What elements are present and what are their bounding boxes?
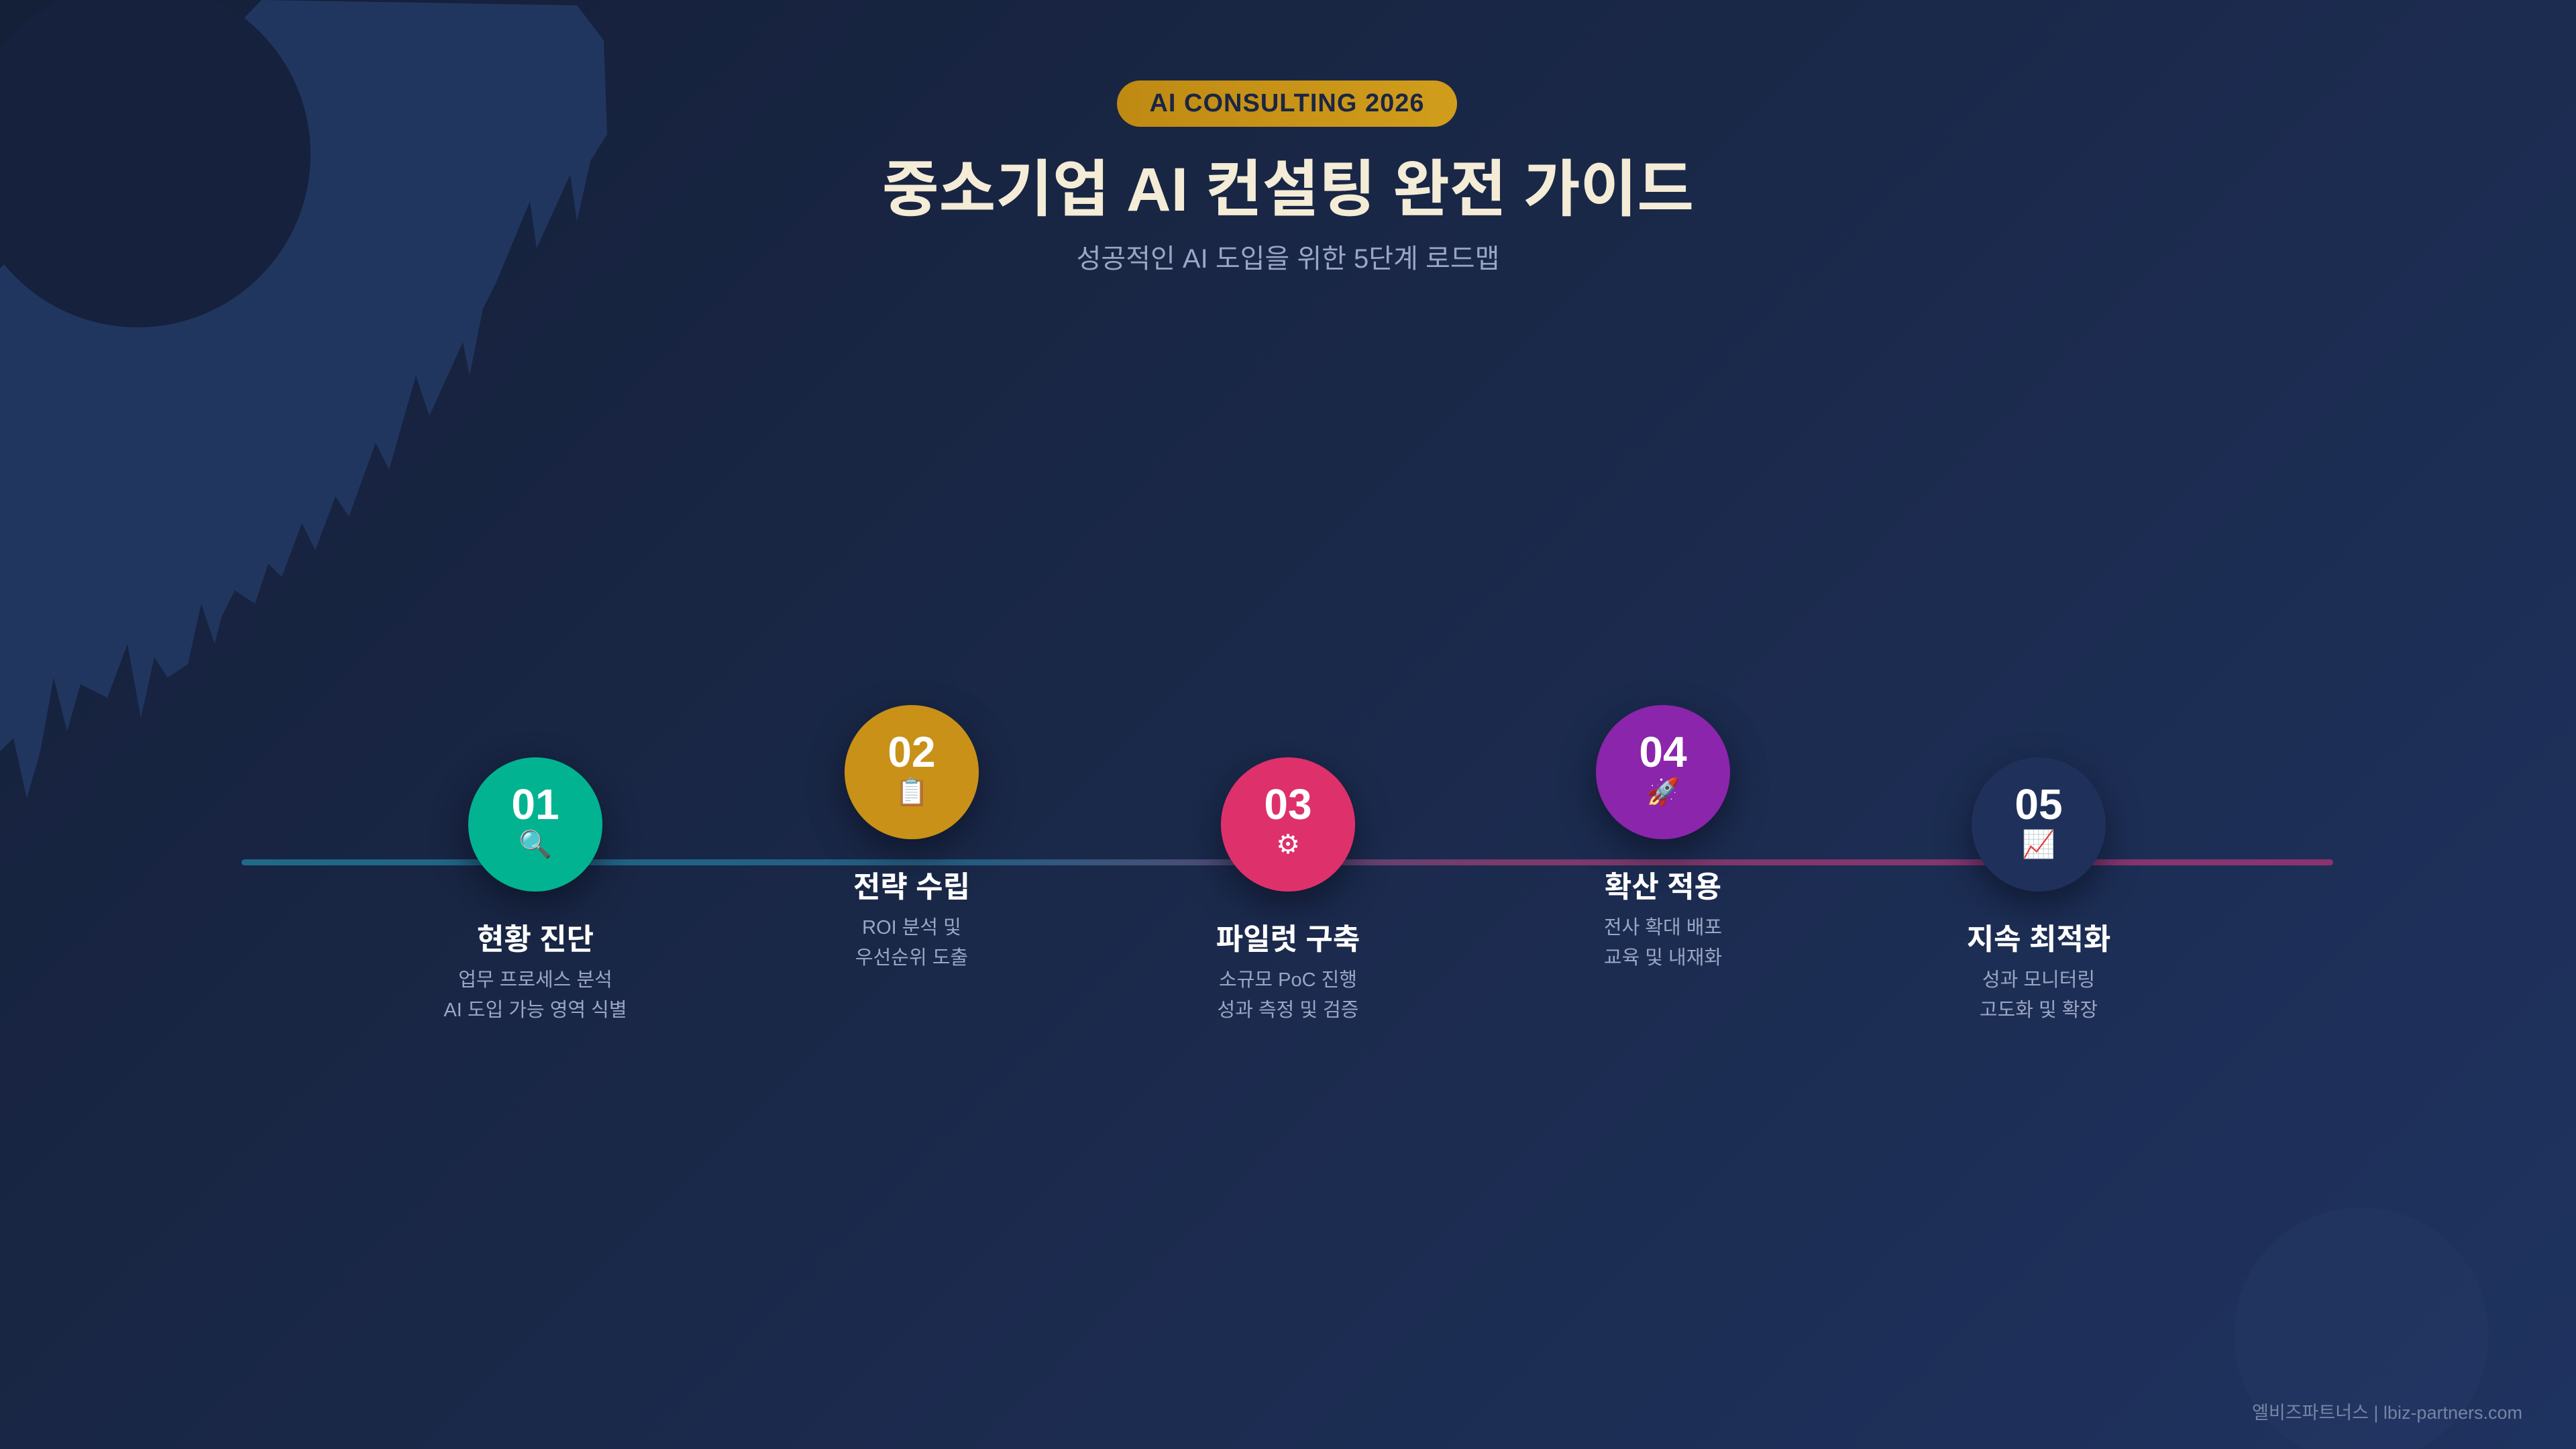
- step desc 04: 교육 및 내재화: [1604, 947, 1722, 969]
- circle 03: 03: [1264, 780, 1312, 828]
- step 01: [443, 757, 627, 1021]
- step title 02: 전략 수립: [853, 871, 970, 904]
- step desc 02: 우선순위 도출: [855, 947, 968, 969]
- step desc 01: AI 도입 가능 영역 식별: [443, 1000, 627, 1021]
- step 02: [838, 705, 985, 969]
- step title 05: 지속 최적화: [1967, 923, 2110, 956]
- footer credit: 엘비즈파트너스 | lbiz-partners.com: [2252, 1403, 2522, 1423]
- step desc 04: [1604, 917, 1722, 969]
- step desc 01: [443, 969, 627, 1021]
- step title 01: 현황 진단: [477, 923, 594, 956]
- badge: AI CONSULTING 2026: [1149, 89, 1425, 117]
- step desc 05: [1980, 969, 2098, 1021]
- circle 05: 05: [2015, 780, 2063, 828]
- decorative brush shape: [0, 0, 607, 798]
- step 04: [1587, 705, 1739, 969]
- circle 01: [468, 757, 602, 892]
- step desc 02: ROI 분석 및: [862, 917, 961, 938]
- circle 03: [1221, 757, 1355, 892]
- circle 04: [1596, 705, 1730, 839]
- circle 01: 🔍: [519, 829, 552, 860]
- circle 02: 📋: [895, 777, 928, 808]
- step title 04: 확산 적용: [1605, 871, 1721, 904]
- circle 02: [845, 705, 979, 839]
- step 03: [1208, 757, 1368, 1021]
- step 05: [1955, 767, 2122, 1021]
- decorative faint circle bottom right: [2214, 1187, 2509, 1449]
- step desc 03: [1218, 969, 1358, 1021]
- subtitle: 성공적인 AI 도입을 위한 5단계 로드맵: [1077, 244, 1499, 274]
- step title 03: 파일럿 구축: [1216, 923, 1360, 956]
- circle 03: ⚙: [1276, 829, 1300, 860]
- step desc 01: 업무 프로세스 분석: [458, 969, 612, 991]
- step desc 04: 전사 확대 배포: [1604, 917, 1722, 938]
- circle 01: 01: [511, 780, 559, 828]
- step desc 03: 소규모 PoC 진행: [1219, 969, 1357, 991]
- circle 04: 🚀: [1646, 777, 1680, 808]
- step desc 02: [855, 917, 968, 969]
- step desc 05: 성과 모니터링: [1982, 969, 2095, 991]
- badge: [1117, 80, 1457, 127]
- step desc 03: 성과 측정 및 검증: [1218, 1000, 1358, 1021]
- circle 05: [1972, 757, 2106, 892]
- circle 05: 📈: [2022, 829, 2055, 860]
- step desc 05: 고도화 및 확장: [1980, 1000, 2098, 1021]
- circle 04: 04: [1639, 728, 1687, 776]
- title: 중소기업 AI 컨설팅 완전 가이드: [882, 156, 1694, 224]
- timeline line: [241, 859, 2333, 865]
- circle 02: 02: [888, 728, 936, 776]
